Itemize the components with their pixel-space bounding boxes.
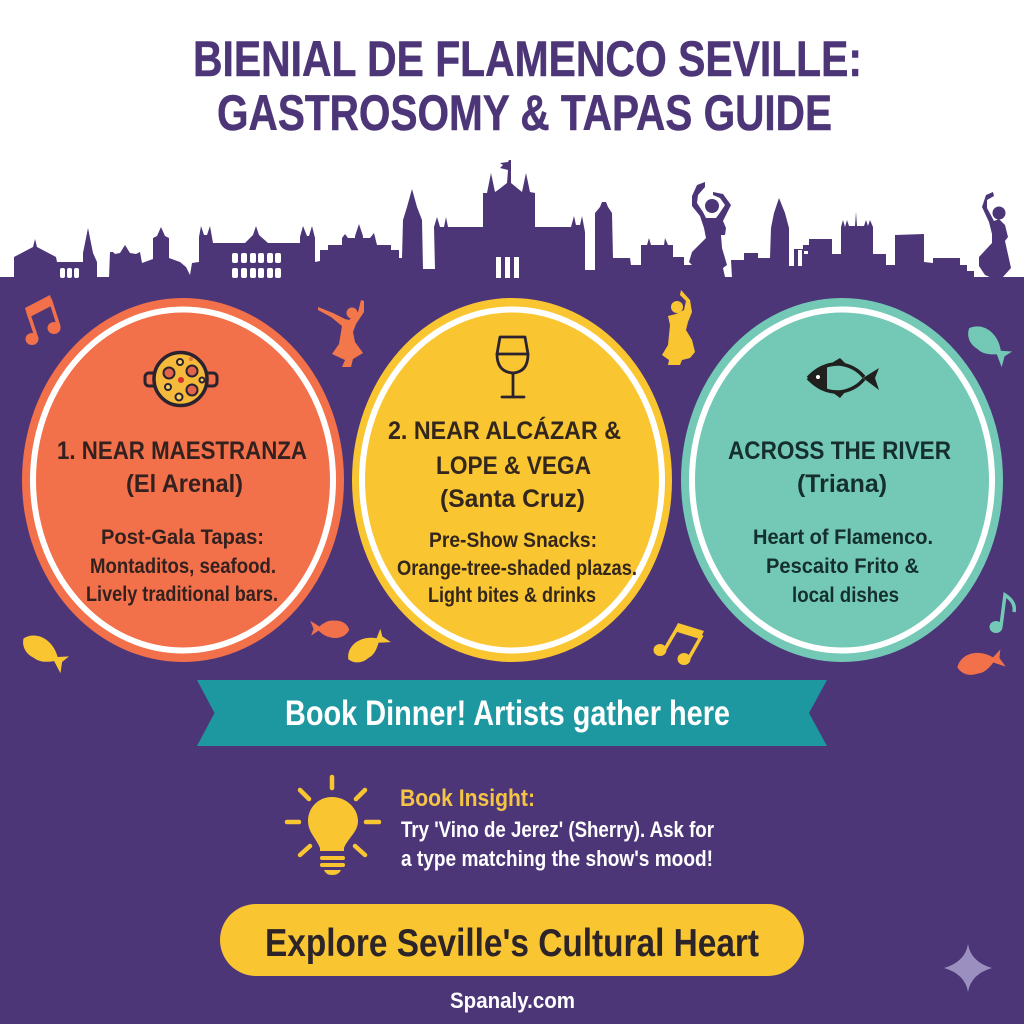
heading: Triana (728, 437, 951, 498)
ribbon banner (197, 680, 827, 746)
icon: yellow fish left (18, 630, 71, 673)
icon: orange fish right (955, 646, 1006, 678)
callout: book insight: Try 'Vino de Jerez' (Sherry). Ask for (401, 817, 714, 842)
icon: yellow dancer (662, 290, 695, 365)
heading: Santa Cruz (388, 416, 621, 513)
ribbon banner: Book Dinner! Artists gather here (285, 694, 730, 733)
icon: orange dancer (318, 300, 364, 367)
text: Triana description: local dishes (792, 584, 899, 607)
text: Triana description: Pescaito Frito & (766, 555, 919, 578)
icon: black fish (808, 358, 879, 398)
dancer silhouette 1 (689, 182, 731, 278)
title (193, 31, 862, 141)
text: Triana description (753, 526, 933, 607)
text: El Arenal description: Montaditos, seafood. (90, 555, 276, 578)
text: El Arenal description: Lively traditional bars. (86, 583, 278, 606)
text: Triana description: Heart of Flamenco. (753, 526, 933, 549)
heading: Triana: ACROSS THE RIVER (728, 437, 951, 465)
callout: book insight (400, 785, 714, 871)
heading: El Arenal: (El Arenal) (126, 470, 243, 498)
title: BIENIAL DE FLAMENCO SEVILLE: (193, 31, 862, 87)
call to action pill (220, 904, 804, 976)
panel: El Arenal circle (22, 298, 344, 662)
heading: Santa Cruz: 2. NEAR ALCÁZAR & (388, 416, 621, 445)
call to action pill: Explore Seville's Cultural Heart (265, 922, 759, 965)
icon: light bulb (287, 777, 379, 875)
text: Santa Cruz description: Pre-Show Snacks: (429, 529, 597, 552)
heading: Santa Cruz: LOPE & VEGA (436, 452, 591, 480)
heading: El Arenal (57, 437, 307, 498)
text: Santa Cruz description: Light bites & drinks (428, 584, 596, 607)
icon: yellow music notes (654, 623, 704, 665)
icon: teal music note (990, 595, 1014, 633)
heading: Santa Cruz: (Santa Cruz) (440, 485, 585, 513)
panel: Triana circle (681, 298, 1003, 662)
text: El Arenal description: Post-Gala Tapas: (101, 526, 264, 549)
skyline of Seville with flamenco dancers (0, 160, 1024, 279)
icon: paella pan (145, 352, 217, 406)
text: El Arenal description (86, 526, 278, 606)
title: GASTROSOMY & TAPAS GUIDE (217, 85, 832, 141)
heading: El Arenal: 1. NEAR MAESTRANZA (57, 437, 307, 465)
icon: orange fish centre (310, 621, 349, 638)
footer: website: Spanaly.com (450, 988, 575, 1013)
heading: Triana: (Triana) (797, 470, 887, 498)
hall windows (60, 250, 808, 278)
icon: teal fish top right (962, 320, 1015, 367)
text: Santa Cruz description: Orange-tree-shaded plazas. (397, 557, 637, 580)
icon: sparkle star (944, 944, 992, 992)
icon: music note top left (25, 295, 60, 345)
dancer silhouette 2 (979, 192, 1011, 278)
icon: yellow fish centre (343, 626, 391, 668)
callout: book insight: Book Insight: (400, 785, 535, 812)
text: Santa Cruz description (397, 529, 637, 607)
panel: Santa Cruz circle (352, 298, 672, 662)
callout: book insight: a type matching the show's mood! (401, 846, 713, 871)
icon: wine glass (497, 337, 528, 397)
